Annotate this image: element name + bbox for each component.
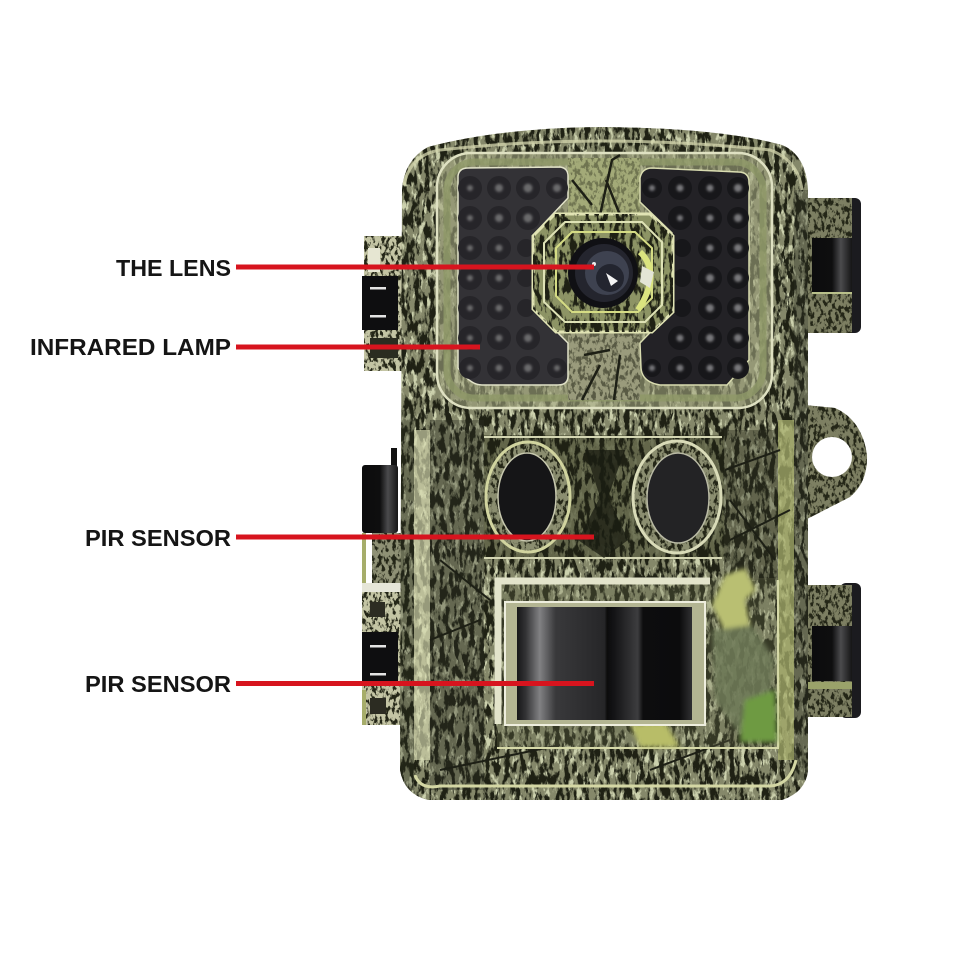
leader line: PIR sensor lower — [236, 681, 594, 686]
upper lamp panel frame — [437, 153, 772, 408]
label: the lens: THE LENS — [116, 255, 231, 281]
clip: left lower mount — [362, 592, 402, 725]
infrared lamp panel: left — [458, 167, 568, 385]
infographic: trail camera diagram — [32, 127, 868, 800]
lens housing — [530, 210, 676, 335]
camera body — [398, 125, 810, 803]
left sensor ring — [484, 440, 572, 555]
Fresnel lens frame — [505, 602, 705, 725]
label: PIR sensor upper: PIR SENSOR — [85, 525, 231, 551]
label: the lens — [116, 255, 594, 281]
clip: right top mount — [798, 198, 861, 333]
leaf camouflage — [630, 568, 777, 747]
icon: camera lens — [568, 238, 654, 308]
clip: left middle latch — [362, 448, 402, 593]
label: infrared lamp: INFRARED LAMP — [30, 334, 231, 360]
right sensor ring — [632, 440, 722, 555]
leader line: PIR sensor upper — [236, 534, 594, 540]
label: PIR sensor lower — [85, 671, 594, 697]
leader line: the lens — [236, 264, 594, 270]
infrared lamp panel: right — [640, 168, 749, 385]
PIR sensor module — [484, 435, 724, 558]
label: infrared lamp — [30, 334, 480, 360]
mounting lug with hole — [808, 405, 868, 518]
lower lens module — [497, 568, 778, 748]
label: PIR sensor upper — [85, 525, 594, 551]
clip: left top mount — [362, 236, 404, 371]
Fresnel lens — [517, 607, 692, 720]
label: PIR sensor lower: PIR SENSOR — [85, 671, 231, 697]
leader line: infrared lamp — [236, 344, 480, 350]
clip: right lower mount — [798, 583, 861, 718]
